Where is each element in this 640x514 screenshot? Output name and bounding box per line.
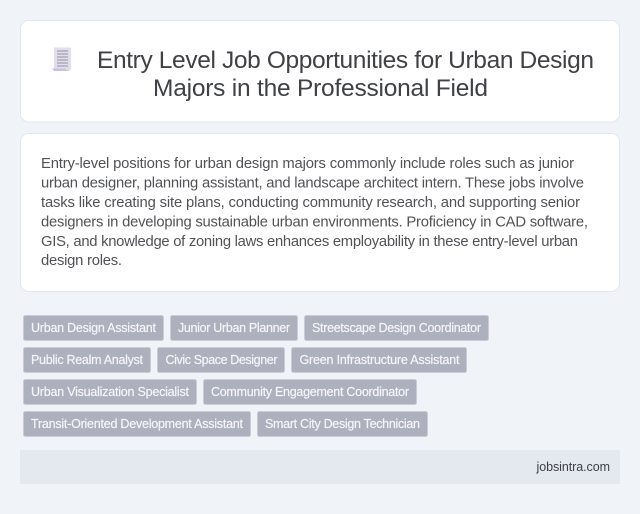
tag: Green Infrastructure Assistant: Green Infrastructure Assistant [300,353,460,367]
title [97,47,594,102]
tag: Urban Visualization Specialist [24,380,196,404]
tag: Junior Urban Planner: Junior Urban Planner [178,321,290,335]
title: Majors in the Professional Field [153,75,488,102]
tag: Civic Space Designer [158,348,284,372]
panel: description [20,134,620,292]
tag: Green Infrastructure Assistant [292,348,466,372]
tag: Transit-Oriented Development Assistant: Transit-Oriented Development Assistant [31,417,244,431]
tag: Streetscape Design Coordinator [304,316,488,340]
tag list [24,316,488,436]
tag: Urban Visualization Specialist: Urban Visualization Specialist [31,385,190,399]
tag: Urban Design Assistant [24,316,164,340]
text block: description: design roles. [41,253,122,269]
tag: Urban Design Assistant: Urban Design Assistant [31,321,157,335]
footer source text: jobsintra.com [536,460,610,474]
icon: document [52,48,71,71]
tag: Public Realm Analyst [24,348,150,372]
text block: description: Entry-level positions for urban design majors commonly include roles such as junior [41,156,574,172]
tag: Transit-Oriented Development Assistant [24,412,250,436]
text block: description [41,156,588,269]
text block: description: designers in developing sustainable urban environments. Proficiency in CAD software, [41,214,588,230]
tag: Community Engagement Coordinator [204,380,416,404]
text block: description: GIS, and knowledge of zoning laws enhances employability in these entry-level urban [41,234,578,250]
tag: Smart City Design Technician: Smart City Design Technician [265,417,420,431]
tag: Streetscape Design Coordinator: Streetscape Design Coordinator [312,321,481,335]
tag: Community Engagement Coordinator: Community Engagement Coordinator [211,385,409,399]
tag: Civic Space Designer: Civic Space Designer [166,353,278,367]
tag: Smart City Design Technician [258,412,428,436]
panel: header [20,20,620,122]
tag: Public Realm Analyst: Public Realm Analyst [31,353,144,367]
tag: Junior Urban Planner [170,316,298,340]
title: Entry Level Job Opportunities for Urban Design [97,47,594,74]
text block: description: urban designer, planning assistant, and landscape architect intern. These jobs involve [41,176,584,192]
footer [20,450,620,484]
text block: description: tasks like creating site plans, conducting community research, and supporting senior [41,195,580,211]
